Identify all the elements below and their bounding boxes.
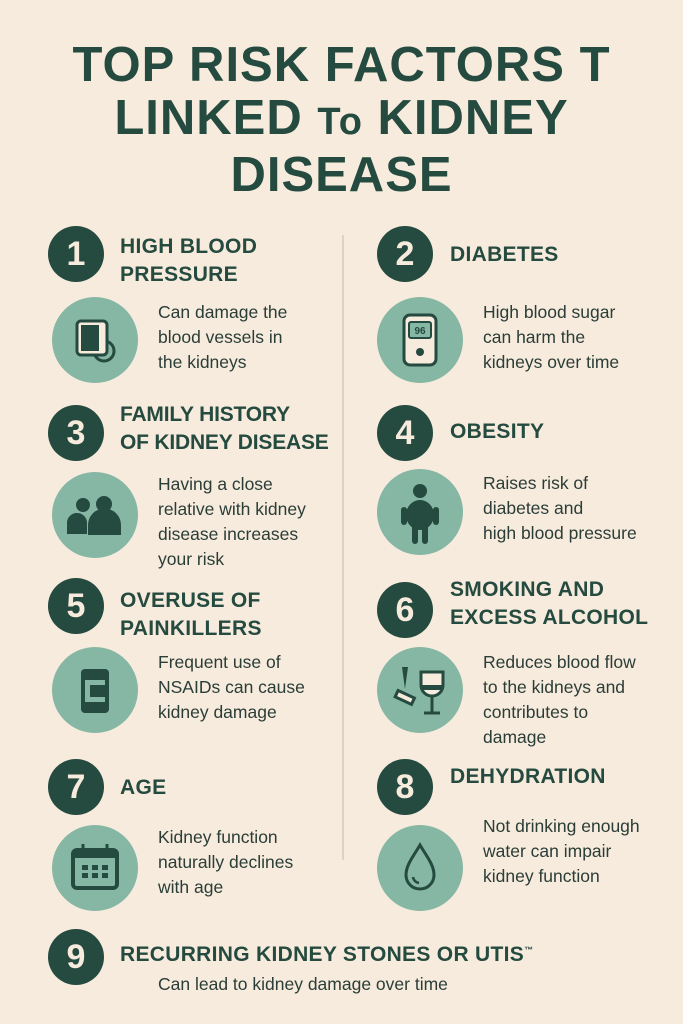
text 7 bbox=[158, 827, 293, 897]
number 6 bbox=[377, 582, 433, 638]
text 2: High blood sugar bbox=[483, 302, 615, 322]
text 9: Can lead to kidney damage over time bbox=[158, 974, 448, 994]
number 6: 6 bbox=[396, 591, 414, 629]
text 6: Reduces blood flow bbox=[483, 652, 636, 672]
text 8: kidney function bbox=[483, 866, 600, 886]
number 5: 5 bbox=[67, 587, 85, 625]
icon: glucose meter: 96 bbox=[414, 326, 426, 337]
text 2: can harm the bbox=[483, 327, 585, 347]
number 9 bbox=[48, 929, 104, 985]
heading 6: EXCESS ALCOHOL bbox=[450, 606, 648, 629]
text 2: kidneys over time bbox=[483, 352, 619, 372]
text 2 bbox=[483, 302, 619, 372]
text 6: to the kidneys and bbox=[483, 677, 625, 697]
text 8 bbox=[483, 816, 640, 886]
text 3: your risk bbox=[158, 549, 224, 569]
heading 4: OBESITY bbox=[450, 420, 544, 443]
text 6: damage bbox=[483, 727, 546, 747]
text 4: diabetes and bbox=[483, 498, 583, 518]
icon: cigarette and glass bbox=[377, 647, 463, 733]
heading 1: PRESSURE bbox=[120, 263, 238, 286]
text 3: disease increases bbox=[158, 524, 298, 544]
number 9: 9 bbox=[67, 938, 85, 976]
heading 3: FAMILY HISTORY bbox=[120, 403, 290, 426]
text 5 bbox=[158, 652, 305, 722]
heading 7: AGE bbox=[120, 776, 166, 799]
number 1 bbox=[48, 226, 104, 282]
number 3: 3 bbox=[67, 414, 85, 452]
text 4: Raises risk of bbox=[483, 473, 588, 493]
text 3 bbox=[158, 474, 306, 569]
text 7: naturally declines bbox=[158, 852, 293, 872]
number 7: 7 bbox=[67, 768, 85, 806]
icon: glucose meter bbox=[377, 297, 463, 383]
text 1: the kidneys bbox=[158, 352, 247, 372]
text 8: Not drinking enough bbox=[483, 816, 640, 836]
icon: blood pressure monitor bbox=[52, 297, 138, 383]
text 3: Having a close bbox=[158, 474, 273, 494]
text 7: with age bbox=[158, 877, 223, 897]
heading 9: RECURRING KIDNEY STONES OR UTIS™ bbox=[120, 943, 533, 966]
text 5: kidney damage bbox=[158, 702, 277, 722]
text 7: Kidney function bbox=[158, 827, 278, 847]
number 2: 2 bbox=[396, 235, 414, 273]
text 1 bbox=[158, 302, 287, 372]
text 6: contributes to bbox=[483, 702, 588, 722]
text 4 bbox=[483, 473, 637, 543]
heading 1: HIGH BLOOD bbox=[120, 235, 257, 258]
heading 5: OVERUSE OF bbox=[120, 589, 261, 612]
title: DISEASE bbox=[230, 148, 453, 202]
number 2 bbox=[377, 226, 433, 282]
text 4: high blood pressure bbox=[483, 523, 637, 543]
heading 3: OF KIDNEY DISEASE bbox=[120, 431, 329, 454]
heading 6 bbox=[450, 578, 648, 629]
heading 5: PAINKILLERS bbox=[120, 617, 262, 640]
title bbox=[72, 38, 611, 202]
heading 3 bbox=[120, 403, 329, 454]
text 5: Frequent use of bbox=[158, 652, 281, 672]
text 5: NSAIDs can cause bbox=[158, 677, 305, 697]
icon: person bbox=[377, 469, 463, 555]
number 4: 4 bbox=[396, 414, 414, 452]
number 7 bbox=[48, 759, 104, 815]
heading 1 bbox=[120, 235, 257, 286]
title: TOP RISK FACTORS T bbox=[72, 38, 611, 92]
heading 2: DIABETES bbox=[450, 243, 559, 266]
number 3 bbox=[48, 405, 104, 461]
icon: calendar bbox=[52, 825, 138, 911]
heading 5 bbox=[120, 589, 262, 640]
heading 8: DEHYDRATION bbox=[450, 765, 606, 788]
icon: pill bottle bbox=[52, 647, 138, 733]
number 5 bbox=[48, 578, 104, 634]
text 8: water can impair bbox=[483, 841, 611, 861]
heading 6: SMOKING AND bbox=[450, 578, 604, 601]
text 1: blood vessels in bbox=[158, 327, 283, 347]
number 8 bbox=[377, 759, 433, 815]
title: LINKED To KIDNEY bbox=[114, 91, 569, 145]
number 1: 1 bbox=[67, 235, 85, 273]
number 4 bbox=[377, 405, 433, 461]
text 6 bbox=[483, 652, 636, 747]
icon: water drop bbox=[377, 825, 463, 911]
divider bbox=[342, 235, 344, 860]
text 3: relative with kidney bbox=[158, 499, 306, 519]
number 8: 8 bbox=[396, 768, 414, 806]
icon: people bbox=[52, 472, 138, 558]
text 1: Can damage the bbox=[158, 302, 287, 322]
